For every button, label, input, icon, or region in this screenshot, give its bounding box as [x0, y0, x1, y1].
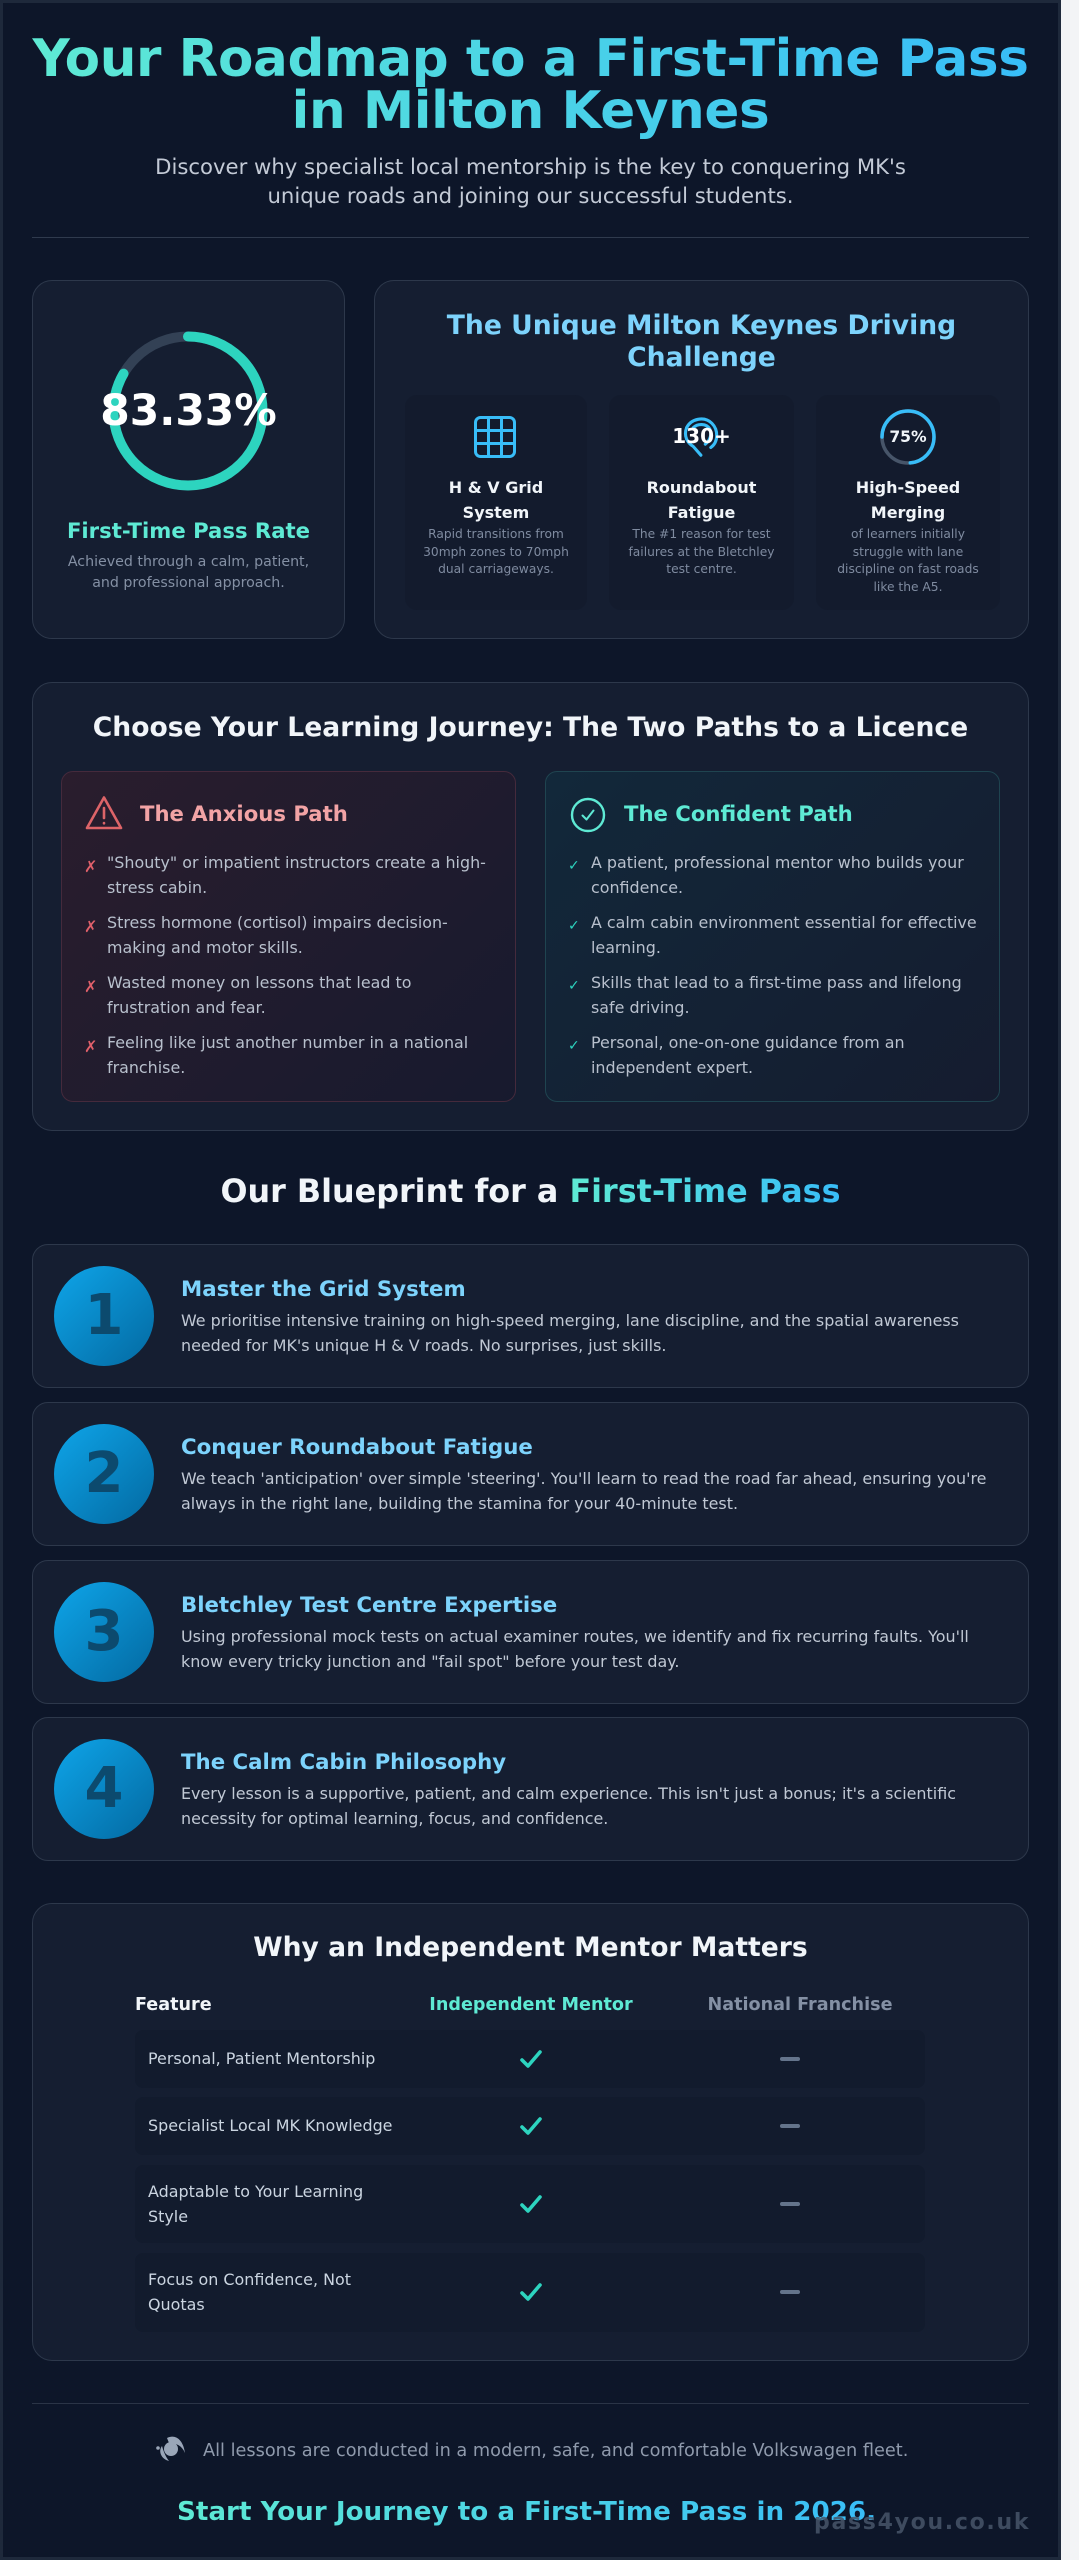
- row 2 dash: [780, 2124, 800, 2128]
- confident list: A calm cabin environment essential for effective: [591, 913, 977, 932]
- row 4 label: Focus on Confidence, Not: [148, 2270, 351, 2289]
- card: roundabout: [609, 395, 794, 610]
- title: Your Roadmap to a First-Time Pass: [32, 29, 1029, 89]
- step 4 card: [32, 1717, 1029, 1861]
- row 3: [135, 2165, 925, 2243]
- confident list: ✓: [568, 978, 580, 994]
- fleet note: All lessons are conducted in a modern, safe, and comfortable Volkswagen fleet.: [203, 2441, 908, 2461]
- title: [32, 29, 1029, 141]
- step 1 number: [54, 1266, 154, 1366]
- confident list: safe driving.: [591, 998, 690, 1017]
- row 4 dash: [780, 2290, 800, 2294]
- row 4 label: Quotas: [148, 2295, 205, 2314]
- step 3 card: [32, 1560, 1029, 1704]
- roundabout description: test centre.: [666, 562, 737, 576]
- step 3 title: Bletchley Test Centre Expertise: [181, 1593, 557, 1618]
- anxious list: franchise.: [107, 1058, 185, 1077]
- stat 75%: 75%: [889, 428, 927, 446]
- anxious list: ✗: [84, 917, 97, 936]
- icon: warning: [86, 796, 122, 830]
- icon: roundabout: [684, 417, 718, 457]
- subtitle: [155, 154, 906, 208]
- row 3 label: [148, 2182, 363, 2226]
- step 2 number: 2: [85, 1441, 123, 1506]
- challenge heading: Challenge: [627, 342, 776, 373]
- panel: two paths: [32, 682, 1029, 1131]
- merging title: [856, 478, 960, 522]
- panel: pass rate: [32, 280, 345, 639]
- step 4 title: The Calm Cabin Philosophy: [181, 1750, 506, 1775]
- step 3 text: [181, 1627, 969, 1671]
- icon: check circle: [570, 798, 606, 832]
- confident list: independent expert.: [591, 1058, 753, 1077]
- row 4 check: [520, 2283, 542, 2301]
- anxious list: ✗: [84, 1037, 97, 1056]
- roundabout description: The #1 reason for test: [632, 527, 771, 541]
- step 4 text: [181, 1784, 956, 1828]
- step 1 text: We prioritise intensive training on high-speed merging, lane discipline, and the spatial awareness: [181, 1311, 959, 1330]
- confident list: [568, 853, 977, 1077]
- subtitle: unique roads and joining our successful students.: [267, 183, 794, 208]
- two paths heading: Choose Your Learning Journey: The Two Paths to a Licence: [93, 712, 968, 743]
- confident list: confidence.: [591, 878, 683, 897]
- anxious list: stress cabin.: [107, 878, 207, 897]
- call to action: Start Your Journey to a First-Time Pass in 2026.: [177, 2497, 876, 2527]
- row 1 check: [520, 2050, 542, 2068]
- anxious list: "Shouty" or impatient instructors create a high-: [107, 853, 486, 872]
- merging title: Merging: [871, 503, 945, 522]
- icon: fleet logo: [156, 2436, 185, 2461]
- step 4 text: Every lesson is a supportive, patient, and calm experience. This isn't just a bonus; it's a scientific: [181, 1784, 956, 1803]
- challenge heading: [446, 310, 956, 373]
- confident heading: The Confident Path: [624, 801, 853, 826]
- chart: pass rate ring: [108, 332, 268, 490]
- anxious list: Stress hormone (cortisol) impairs decision-: [107, 913, 448, 932]
- subtitle: Discover why specialist local mentorship is the key to conquering MK's: [155, 154, 906, 179]
- step 1 text: needed for MK's unique H & V roads. No surprises, just skills.: [181, 1336, 666, 1355]
- confident list: ✓: [568, 858, 580, 874]
- blueprint heading: Our Blueprint for a First-Time Pass: [220, 1173, 841, 1210]
- anxious list: ✗: [84, 977, 97, 996]
- anxious list: frustration and fear.: [107, 998, 266, 1017]
- step 1 text: [181, 1311, 959, 1355]
- step 4 text: necessity for optimal learning, focus, and confidence.: [181, 1809, 608, 1828]
- confident list: Personal, one-on-one guidance from an: [591, 1033, 905, 1052]
- card: grid system: [405, 395, 587, 610]
- grid description: dual carriageways.: [438, 562, 554, 576]
- confident list: A patient, professional mentor who builds your: [591, 853, 964, 872]
- grid description: [423, 527, 569, 576]
- icon: grid: [474, 416, 516, 458]
- row 2: [135, 2097, 925, 2155]
- step 2 title: Conquer Roundabout Fatigue: [181, 1435, 533, 1460]
- row 4: [135, 2253, 925, 2332]
- grid title: H & V Grid: [449, 478, 543, 497]
- confident list: ✓: [568, 1038, 580, 1054]
- chart: 75% ring: [880, 409, 936, 465]
- panel: anxious path: [61, 771, 516, 1102]
- grid description: 30mph zones to 70mph: [423, 545, 569, 559]
- step 3 number: [54, 1582, 154, 1682]
- panel: confident path: [545, 771, 1000, 1102]
- confident list: ✓: [568, 918, 580, 934]
- table heading: Why an Independent Mentor Matters: [253, 1932, 808, 1963]
- pass rate label: First-Time Pass Rate: [67, 518, 310, 543]
- pass rate note: and professional approach.: [92, 575, 285, 591]
- row 1 label: Personal, Patient Mentorship: [148, 2049, 375, 2068]
- step 3 text: Using professional mock tests on actual examiner routes, we identify and fix recurring faults. You'll: [181, 1627, 969, 1646]
- row 3 check: [520, 2195, 542, 2213]
- merging description: of learners initially: [851, 527, 965, 541]
- anxious list: making and motor skills.: [107, 938, 303, 957]
- step 2 text: We teach 'anticipation' over simple 'steering'. You'll learn to read the road far ahead, ensuring you're: [181, 1469, 986, 1488]
- step 4 number: 4: [85, 1756, 123, 1821]
- stat 130+: 130+: [672, 424, 731, 448]
- roundabout title: [647, 478, 756, 522]
- pass rate value: 83.33%: [100, 386, 277, 435]
- grid description: Rapid transitions from: [428, 527, 564, 541]
- panel: mentor table: [32, 1903, 1029, 2361]
- step 1 title: Master the Grid System: [181, 1277, 466, 1302]
- roundabout description: [628, 527, 774, 576]
- anxious list: Wasted money on lessons that lead to: [107, 973, 411, 992]
- step 2 card: [32, 1402, 1029, 1546]
- panel: challenge: [374, 280, 1029, 639]
- title: in Milton Keynes: [292, 81, 769, 141]
- row 1 dash: [780, 2057, 800, 2061]
- pass rate note: [68, 554, 309, 591]
- step 3 number: 3: [85, 1599, 123, 1664]
- roundabout title: Roundabout: [647, 478, 756, 497]
- anxious heading: The Anxious Path: [140, 801, 348, 826]
- table header: feature: Feature: [135, 1995, 212, 2015]
- table header: national franchise: National Franchise: [707, 1995, 893, 2015]
- step 2 text: [181, 1469, 986, 1513]
- roundabout title: Fatigue: [668, 503, 735, 522]
- anxious list: ✗: [84, 857, 97, 876]
- step 1 card: [32, 1244, 1029, 1388]
- merging description: struggle with lane: [853, 545, 963, 559]
- step 4 number: [54, 1739, 154, 1839]
- roundabout description: failures at the Bletchley: [628, 545, 774, 559]
- row 1: [135, 2030, 925, 2088]
- row 3 dash: [780, 2202, 800, 2206]
- merging description: discipline on fast roads: [837, 562, 979, 576]
- confident list: Skills that lead to a first-time pass and lifelong: [591, 973, 962, 992]
- grid title: [449, 478, 543, 522]
- row 3 label: Adaptable to Your Learning: [148, 2182, 363, 2201]
- table header: independent mentor: Independent Mentor: [429, 1995, 633, 2015]
- step 1 number: 1: [85, 1283, 123, 1348]
- row 4 label: [148, 2270, 351, 2314]
- pass rate note: Achieved through a calm, patient,: [68, 554, 309, 570]
- grid title: System: [463, 503, 529, 522]
- anxious list: [84, 853, 486, 1077]
- step 3 text: know every tricky junction and "fail spot" before your test day.: [181, 1652, 679, 1671]
- row 2 check: [520, 2117, 542, 2135]
- anxious list: Feeling like just another number in a national: [107, 1033, 468, 1052]
- row 2 label: Specialist Local MK Knowledge: [148, 2116, 392, 2135]
- row 3 label: Style: [148, 2207, 188, 2226]
- challenge heading: The Unique Milton Keynes Driving: [447, 310, 956, 341]
- merging title: High-Speed: [856, 478, 960, 497]
- watermark: pass4you.co.uk: [814, 2510, 1030, 2535]
- step 2 text: always in the right lane, building the stamina for your 40-minute test.: [181, 1494, 738, 1513]
- confident list: learning.: [591, 938, 661, 957]
- merging description: like the A5.: [874, 580, 942, 594]
- merging description: [837, 527, 979, 594]
- card: merging: [816, 395, 1000, 610]
- step 2 number: [54, 1424, 154, 1524]
